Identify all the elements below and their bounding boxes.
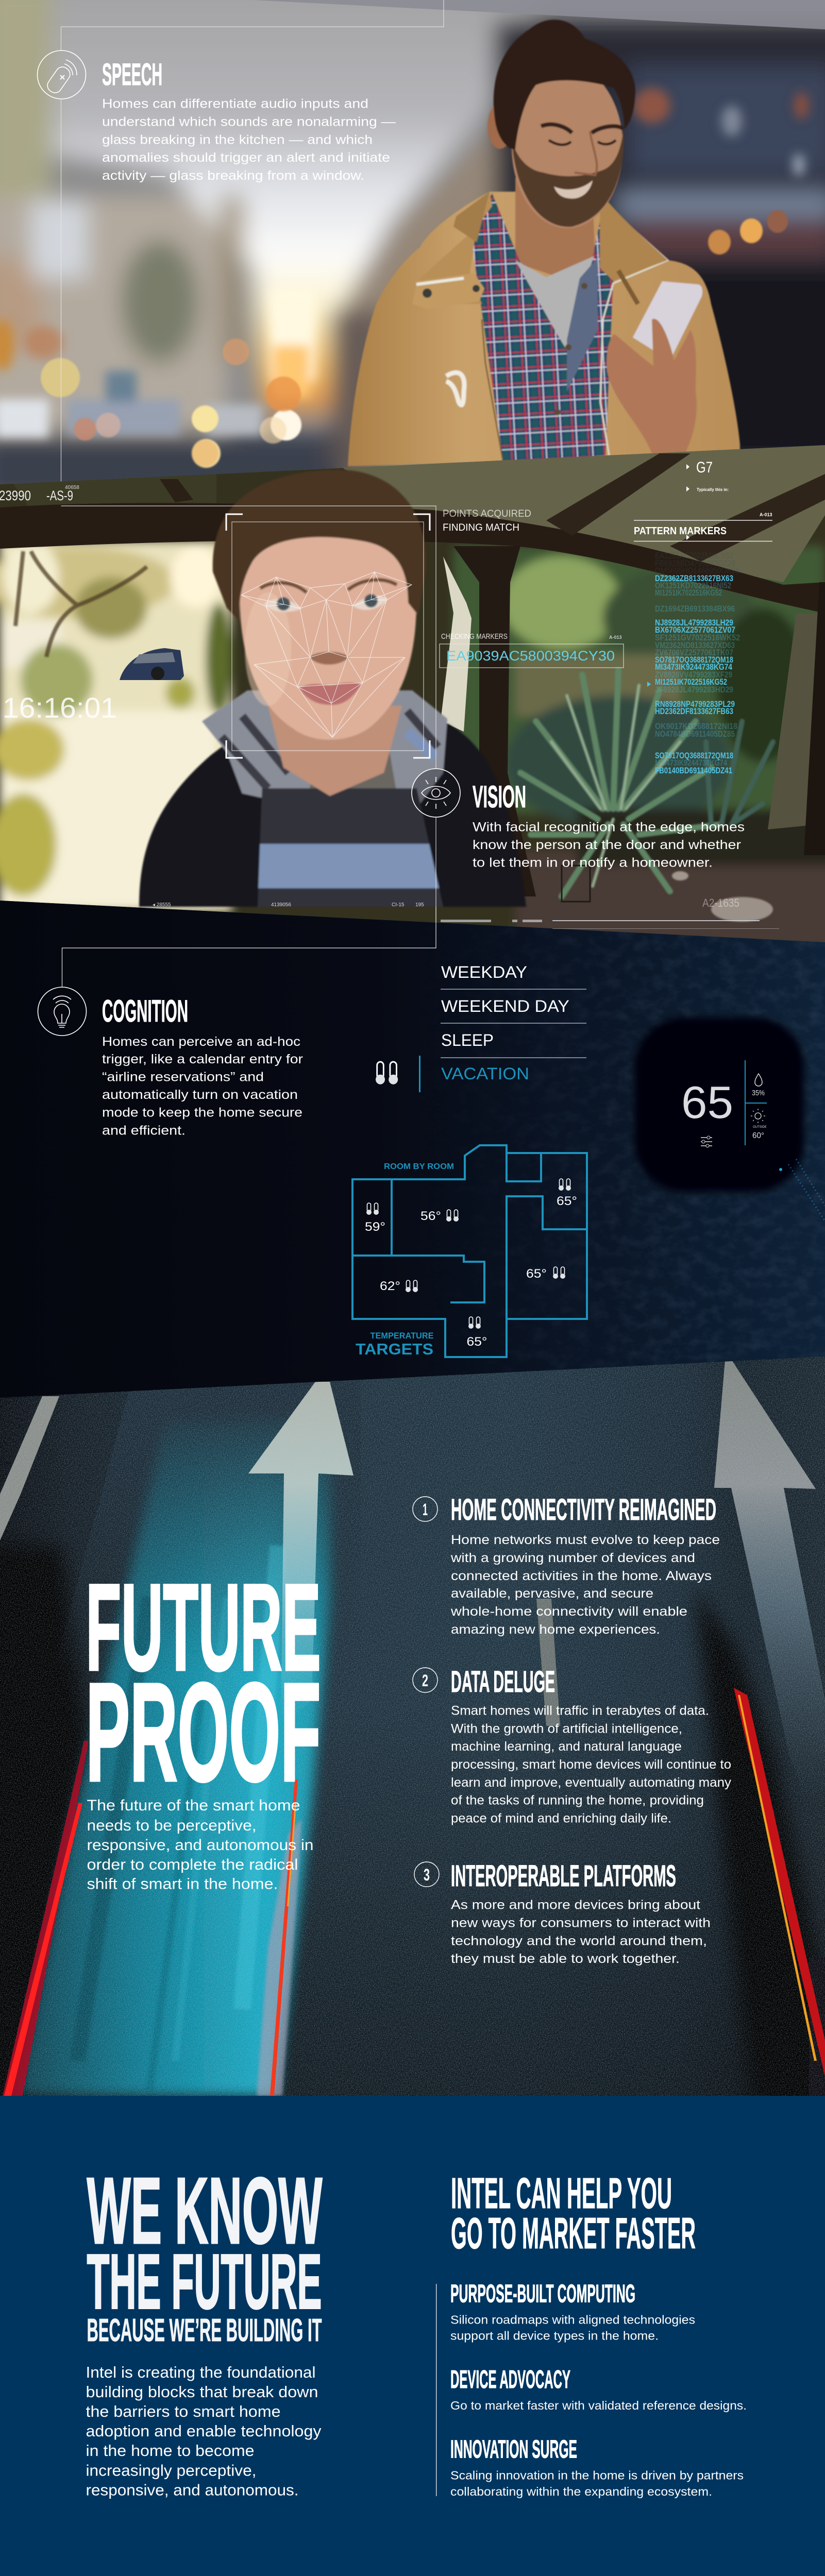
- connector line repeat: [62, 907, 436, 987]
- heading: we know the future: [87, 2158, 323, 2348]
- data list: pattern marker codes: RN8928NP4799283PL29: [655, 699, 735, 709]
- data list: pattern marker codes: ZV8928VV4799283XF29: [655, 670, 732, 680]
- text block: speech body: activity — glass breaking from a window.: [102, 168, 364, 183]
- panel: future proof road: FUTURE: [86, 1558, 321, 1696]
- light trail: pink-white band: [257, 1819, 301, 2096]
- scan frame: [226, 514, 430, 758]
- arrow left: [248, 1382, 353, 1726]
- text block: intel intro: increasingly perceptive,: [86, 2462, 257, 2479]
- floor plan: 56°: [420, 1209, 441, 1223]
- item 3: interoperable platforms: new ways for consumers to interact with: [451, 1916, 711, 1930]
- data list: pattern marker codes: NO4784BD6911405DZ85: [655, 729, 735, 739]
- item 2: data deluge: processing, smart home devices will continue to: [451, 1757, 731, 1772]
- floor plan: ROOM BY ROOM: [384, 1162, 454, 1171]
- item 1: home connectivity: connected activities in the home. Always: [451, 1569, 712, 1583]
- data list: pattern marker codes: EA1251AC7022516CY52: [655, 551, 733, 561]
- benefit: device advocacy: [450, 2366, 747, 2412]
- benefit: purpose-built computing: support all device types in the home.: [450, 2329, 659, 2342]
- center dash: [536, 1599, 560, 1726]
- item 3: interoperable platforms: they must be able to work together.: [451, 1952, 680, 1966]
- text block: cognition body: “airline reservations” and: [102, 1070, 264, 1084]
- item 2: data deluge: machine learning, and natural language: [451, 1739, 682, 1754]
- benefit: innovation surge: Scaling innovation in the home is driven by partners: [450, 2469, 744, 2482]
- data list: pattern marker codes: MI1251IK7022516KG52: [655, 677, 727, 687]
- agave plant: [520, 670, 773, 896]
- panel: we know the future: THE FUTURE: [87, 2238, 322, 2325]
- text block: intel intro: the barriers to smart home: [86, 2402, 280, 2420]
- benefit: innovation surge: collaborating within the expanding ecosystem.: [450, 2485, 712, 2498]
- HUD readouts: EA9039AC5800394CY30: [446, 648, 615, 664]
- red light trails: [3, 1688, 825, 2096]
- item 3: interoperable platforms: As more and more devices bring about: [451, 1898, 700, 1912]
- HUD readouts: POINTS ACQUIRED: [443, 509, 531, 519]
- data list: pattern marker codes: ZV6706VZ2577061TK07: [655, 648, 733, 657]
- benefit: innovation surge: INNOVATION SURGE: [450, 2436, 577, 2464]
- HUD readouts: 4139056: [271, 902, 291, 908]
- floor plan: 59°: [365, 1220, 385, 1234]
- panel: future proof road: [0, 1350, 825, 2112]
- item 2: data deluge: DATA DELUGE: [451, 1665, 555, 1699]
- car: [120, 648, 184, 680]
- road line left: [0, 1396, 59, 1540]
- menu: thermostat modes: WEEKDAY: [441, 963, 527, 981]
- text block: intel intro: Intel is creating the foundational: [86, 2363, 315, 2381]
- arrow right: [714, 1360, 825, 1855]
- HUD readouts: -AS-9: [46, 488, 73, 503]
- text block: intel intro: adoption and enable technology: [86, 2422, 322, 2440]
- panel: speech: [0, 0, 825, 515]
- heading: we know the future: BECAUSE WE’RE BUILDING IT: [87, 2313, 322, 2348]
- heading: intel can help: [451, 2169, 696, 2258]
- HUD readouts: 195: [415, 902, 424, 908]
- device: thermostat: [635, 1018, 825, 1221]
- head: [512, 65, 623, 228]
- HUD readouts: ◂ 28555: [153, 902, 171, 908]
- data list: pattern marker codes: MI1251IK7022516KG52: [655, 588, 722, 598]
- text block: intel intro: responsive, and autonomous.: [86, 2481, 299, 2499]
- data list: pattern marker codes: SO7817OQ3688172QM18: [655, 655, 733, 665]
- HUD bars: [441, 920, 779, 929]
- item 1: home connectivity: 1: [423, 1500, 428, 1519]
- floor plan: TARGETS: [356, 1340, 433, 1358]
- text block: speech body: understand which sounds are nonalarming —: [102, 114, 396, 129]
- text block: cognition body: trigger, like a calendar entry for: [102, 1052, 303, 1066]
- data list: pattern marker codes: DZ2362ZB8133627BX63: [655, 573, 733, 583]
- text block: vision body: With facial recognition at the edge, homes: [473, 820, 745, 835]
- text block: vision body: to let them in or notify a homeowner.: [473, 855, 713, 870]
- icon: eye: [412, 769, 460, 817]
- menu: thermostat modes: WEEKEND DAY: [441, 997, 569, 1015]
- bokeh lights: [41, 210, 788, 468]
- text block: speech body: glass breaking in the kitchen — and which: [102, 133, 373, 147]
- face recognition mesh: [241, 572, 412, 737]
- text block: future proof intro: The future of the smart home: [87, 1797, 300, 1814]
- panel: speech: SPEECH: [102, 57, 162, 92]
- icon: remote with signal: [37, 50, 86, 99]
- item 2: data deluge: [413, 1665, 732, 1826]
- data list: pattern marker codes: MI3473IK9244738KG74: [655, 662, 732, 672]
- HUD readouts: [0, 459, 772, 909]
- text block: future proof intro: responsive, and autonomous in: [87, 1837, 313, 1854]
- item 2: data deluge: learn and improve, eventually automating many: [451, 1775, 732, 1790]
- item 2: data deluge: Smart homes will traffic in terabytes of data.: [451, 1703, 709, 1718]
- item 1: home connectivity: [413, 1493, 720, 1637]
- text block: future proof intro: shift of smart in the home.: [87, 1875, 278, 1893]
- data list: pattern marker codes: SO7817OQ3688172QM18: [655, 751, 733, 760]
- top grey band: [252, 0, 825, 29]
- data list: pattern marker codes: HD2362DF8133627FB63: [655, 706, 733, 716]
- HUD readouts: FINDING MATCH: [443, 522, 519, 533]
- benefit: purpose-built computing: Silicon roadmaps with aligned technologies: [450, 2313, 695, 2327]
- HUD readouts: A-013: [609, 635, 622, 640]
- dark road edges: [0, 1546, 825, 2112]
- icon: phone: [633, 281, 702, 361]
- data list: pattern marker codes: NJ8928JL4799283LH29: [655, 618, 733, 628]
- device: thermostat: OUTSIDE: [753, 1126, 767, 1129]
- device: thermostat: 60°: [752, 1131, 764, 1140]
- wall texture: [361, 902, 825, 1391]
- hand: [607, 319, 697, 453]
- HUD readouts: G7: [696, 459, 713, 476]
- illustration: man with phone: [348, 20, 740, 466]
- data list: pattern marker codes: OK1251KD7022516NI52: [655, 581, 731, 590]
- item 1: home connectivity: amazing new home experiences.: [451, 1622, 660, 1637]
- text block: vision body: [473, 820, 745, 870]
- teal light streak: [15, 1412, 330, 2096]
- text block: intel intro: building blocks that break down: [86, 2383, 318, 2401]
- HUD readouts: A-013: [760, 512, 772, 517]
- data list: pattern marker codes: QM5695HQ1466950OK96: [655, 566, 739, 575]
- text block: future proof intro: [87, 1797, 313, 1893]
- item 2: data deluge: 2: [422, 1671, 428, 1690]
- ceiling and beams: [330, 443, 825, 582]
- HUD readouts: 16:16:01: [3, 691, 117, 724]
- data list: pattern marker codes: OK9017KD2688172NI18: [655, 721, 737, 731]
- road background: [0, 1350, 825, 2112]
- data list: pattern marker codes: BX6706XZ2577061ZV07: [655, 625, 735, 635]
- heading: vision: VISION: [473, 779, 526, 814]
- text block: cognition body: [102, 1035, 303, 1138]
- text block: cognition body: mode to keep the home secure: [102, 1106, 302, 1120]
- connector line: vision to cognition: [61, 506, 436, 987]
- item 2: data deluge: peace of mind and enriching daily life.: [451, 1811, 671, 1826]
- benefit: innovation surge: [450, 2436, 744, 2498]
- menu: thermostat modes: SLEEP: [441, 1031, 494, 1049]
- text block: intel intro: [86, 2363, 322, 2499]
- data list: pattern marker codes: FB0140BD6911405DZ41: [655, 766, 732, 775]
- text block: future proof intro: order to complete the radical: [87, 1856, 298, 1873]
- text block: future proof intro: needs to be perceptive,: [87, 1817, 257, 1834]
- illustration: boy: [139, 470, 526, 909]
- item 2: data deluge: With the growth of artificial intelligence,: [451, 1722, 682, 1736]
- photo: blurred street background: [0, 0, 825, 515]
- panel: vision: [0, 443, 825, 987]
- connector line: speech to vision: [61, 0, 444, 506]
- panel: we know the future: WE KNOW: [87, 2158, 323, 2263]
- benefit: purpose-built computing: [450, 2280, 695, 2342]
- benefit: device advocacy: Go to market faster with validated reference designs.: [450, 2399, 747, 2412]
- benefit: purpose-built computing: PURPOSE-BUILT COMPUTING: [450, 2280, 635, 2308]
- floor plan: 65°: [557, 1194, 577, 1208]
- menu: thermostat modes: [376, 963, 586, 1092]
- text block: cognition body: and efficient.: [102, 1123, 186, 1138]
- HUD readouts: CHECKING MARKERS: [441, 632, 508, 641]
- data list: pattern marker codes: FB8928BD4799283DZ29: [655, 558, 735, 568]
- device: thermostat: 65: [681, 1077, 733, 1128]
- item 3: interoperable platforms: 3: [424, 1866, 430, 1884]
- text block: cognition body: automatically turn on vacation: [102, 1088, 298, 1102]
- HUD readouts: PATTERN MARKERS: [634, 526, 727, 537]
- heading: future proof: [86, 1558, 321, 1810]
- menu: thermostat modes: VACATION: [441, 1064, 529, 1083]
- text block: intel intro: in the home to become: [86, 2442, 254, 2460]
- tree trunks: [15, 551, 147, 657]
- data list: pattern marker codes: VM2362ND8133627XD63: [655, 640, 735, 650]
- data list: pattern marker codes: JF8928JL4799283HD29: [655, 685, 733, 694]
- floor plan: 65°: [526, 1267, 547, 1281]
- HUD readouts: CI-15: [392, 902, 405, 908]
- benefit: device advocacy: DEVICE ADVOCACY: [450, 2366, 570, 2394]
- panel: cognition: [0, 901, 825, 1401]
- icon: smart bulb: [38, 987, 87, 1036]
- data list: pattern marker codes: [647, 551, 740, 775]
- blue background: [0, 2096, 825, 2576]
- data list: pattern marker codes: SF1251GV7022516WK52: [655, 633, 740, 642]
- item 3: interoperable platforms: technology and the world around them,: [451, 1934, 707, 1948]
- HUD readouts: A2-1635: [702, 896, 739, 909]
- text block: speech body: Homes can differentiate audio inputs and: [102, 97, 368, 111]
- panel: we know the future: [0, 2096, 825, 2576]
- item 1: home connectivity: whole-home connectivity will enable: [450, 1604, 687, 1619]
- text block: cognition body: Homes can perceive an ad-hoc: [102, 1035, 300, 1049]
- floor plan: 62°: [380, 1279, 400, 1293]
- panel: cognition: COGNITION: [102, 994, 188, 1028]
- item 3: interoperable platforms: [414, 1859, 711, 1966]
- item 1: home connectivity: with a growing number of devices and: [450, 1551, 695, 1565]
- device: thermostat: 35%: [752, 1089, 765, 1097]
- HUD readouts: 23990: [0, 488, 31, 503]
- floor plan: 65°: [467, 1335, 487, 1349]
- item 1: home connectivity: available, pervasive, and secure: [451, 1586, 653, 1601]
- photo: porch background: [0, 443, 825, 948]
- text block: speech body: [102, 97, 396, 183]
- text block: speech body: anomalies should trigger an alert and initiate: [102, 150, 390, 165]
- item 1: home connectivity: Home networks must evolve to keep pace: [451, 1533, 720, 1547]
- floor plan: TEMPERATURE: [370, 1331, 434, 1341]
- text block: vision body: know the person at the door and whether: [473, 838, 741, 852]
- HUD readouts: Typically this in:: [697, 487, 729, 492]
- data list: pattern marker codes: MI3473IK9244738KG74: [655, 758, 727, 768]
- item 2: data deluge: of the tasks of running the home, providing: [451, 1793, 704, 1807]
- floor plan: [352, 1145, 587, 1358]
- panel: future proof road: PROOF: [86, 1654, 321, 1810]
- data list: pattern marker codes: DZ1694ZB6913384BX96: [655, 604, 735, 614]
- HUD readouts: 40658: [65, 485, 79, 490]
- dark wall background: [0, 901, 825, 1401]
